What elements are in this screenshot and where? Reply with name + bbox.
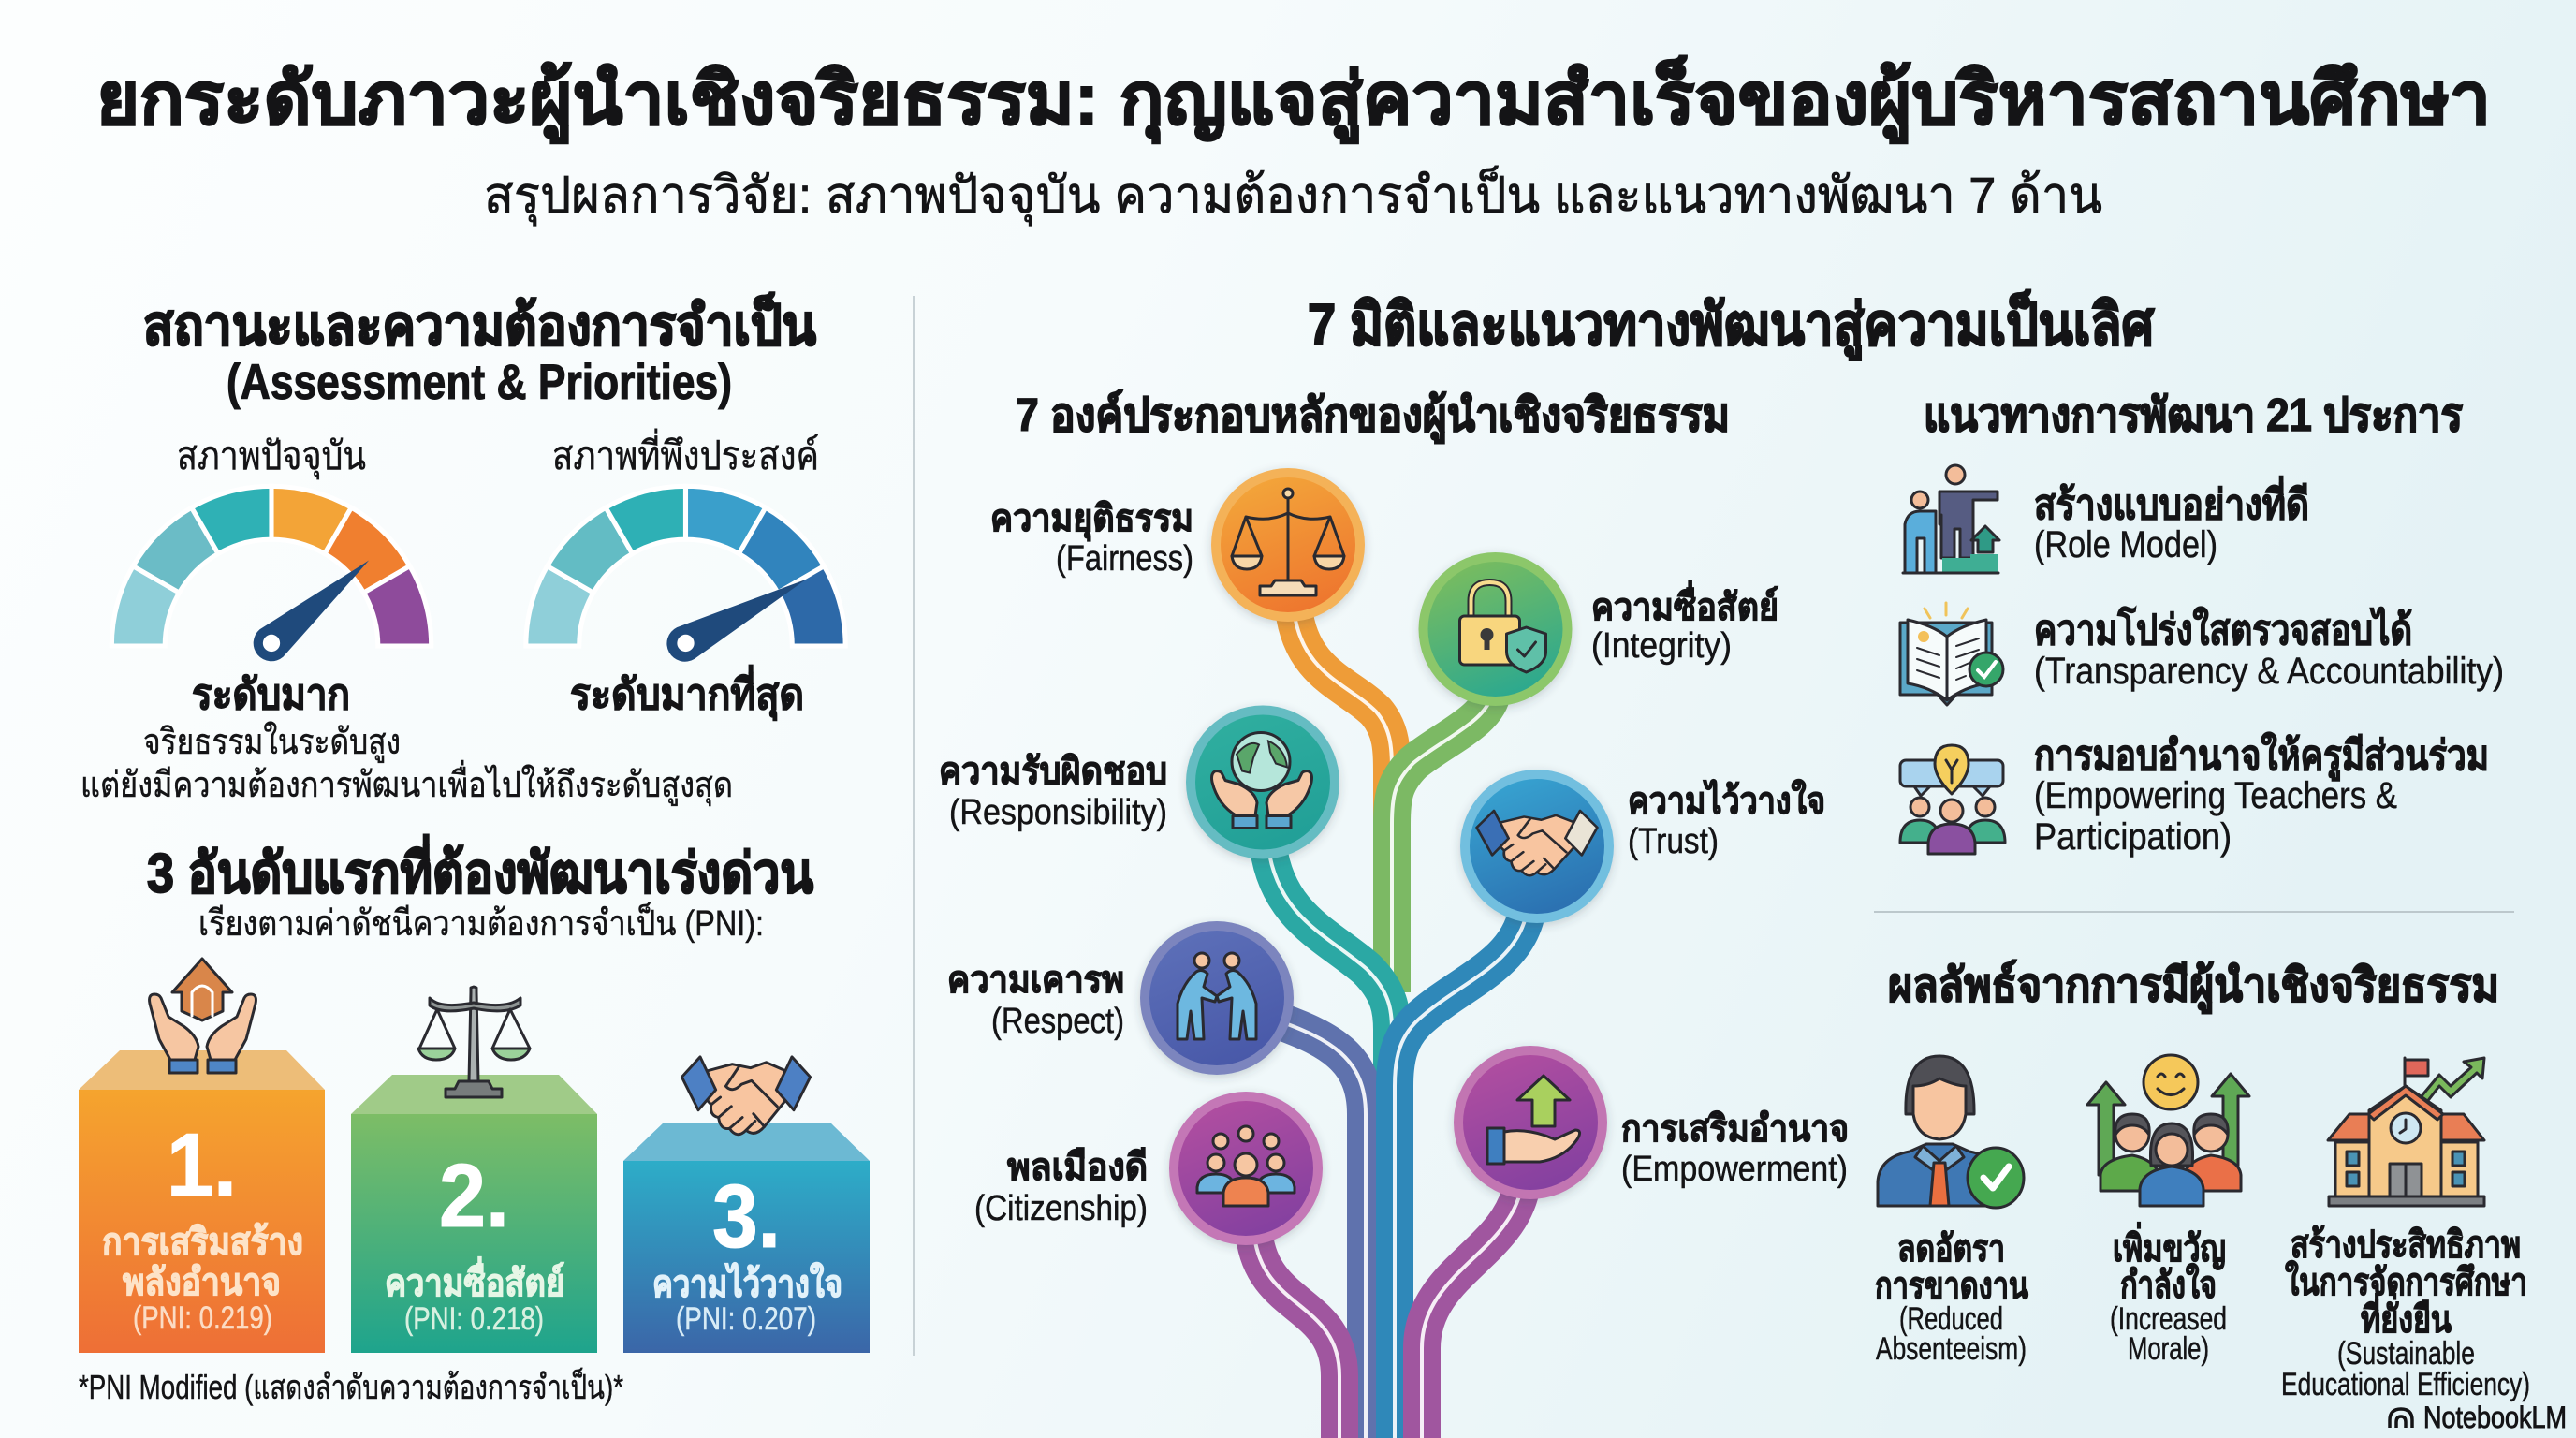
- node: fairness: ความยุติธรรม: [990, 498, 1193, 542]
- heading: assessment: (Assessment & Priorities): [227, 355, 732, 410]
- node: trust: (Trust): [1628, 822, 1719, 861]
- icon: hand raising arrow: [1487, 1076, 1580, 1164]
- podium 3: trust: (PNI: 0.207): [676, 1301, 816, 1337]
- icon: hands holding school: [150, 959, 256, 1073]
- title: ยกระดับภาวะผู้นำเชิงจริยธรรม: กุญแจสู่ความสำเร็จของผู้บริหารสถานศึกษา: [96, 55, 2491, 144]
- node: responsibility: (Responsibility): [949, 793, 1167, 832]
- heading: 21 guidelines: แนวทางการพัฒนา 21 ประการ: [1924, 390, 2463, 441]
- node: integrity: [1419, 552, 1778, 706]
- icon: handshake: [681, 1057, 811, 1135]
- heading: top three priorities: เรียงตามค่าดัชนีความต้องการจำเป็น (PNI):: [198, 902, 764, 944]
- node: citizenship: พลเมืองดี: [1007, 1147, 1148, 1188]
- outcome: increased morale: [2087, 1055, 2249, 1367]
- icon: hands holding globe: [1211, 732, 1312, 828]
- heading: top three priorities: 3 อันดับแรกที่ต้องพัฒนาเร่งด่วน: [147, 834, 813, 904]
- item: role model: [1903, 465, 2309, 573]
- item: empowering teachers: Participation): [2034, 816, 2232, 858]
- node: trust: ความไว้วางใจ: [1628, 779, 1825, 822]
- footnote: *PNI Modified (แสดงลำดับความต้องการจำเป็น)*: [79, 1366, 623, 1406]
- outcome: increased morale: (Increased: [2110, 1301, 2227, 1337]
- icon: two people bowing: [1178, 953, 1256, 1039]
- podium 2: integrity: ความซื่อสัตย์: [385, 1256, 564, 1304]
- item: empowering teachers: การมอบอำนาจให้ครูมีส่วนร่วม: [2034, 731, 2489, 781]
- gauge explanation: จริยธรรมในระดับสูง: [143, 722, 401, 763]
- icon: smiling group with arrows: [2087, 1055, 2249, 1206]
- node: fairness: [990, 468, 1365, 622]
- heading: seven dimensions: 7 มิติและแนวทางพัฒนาสู่ความเป็นเลิศ: [1308, 289, 2155, 360]
- icon: lock and shield: [1460, 582, 1546, 672]
- node: empowerment: การเสริมอำนาจ: [1621, 1108, 1849, 1150]
- item: empowering teachers: [1900, 731, 2489, 858]
- podium 2: integrity: (PNI: 0.218): [404, 1301, 544, 1337]
- gauge: current state: สภาพปัจจุบัน: [177, 433, 366, 480]
- node: responsibility: [939, 706, 1339, 859]
- heading: assessment: [143, 292, 816, 410]
- outcome: reduced absenteeism: Absenteeism): [1876, 1331, 2027, 1367]
- gauge explanation: แต่ยังมีความต้องการพัฒนาเพื่อไปให้ถึงระดับสูงสุด: [80, 760, 733, 806]
- outcome: sustainable efficiency: (Sustainable: [2337, 1336, 2475, 1372]
- node: citizenship: [974, 1092, 1323, 1245]
- panel: outcomes: [1875, 960, 2530, 1402]
- outcome: sustainable efficiency: สร้างประสิทธิภาพ: [2291, 1225, 2521, 1266]
- podium 1: empowerment: พลังอำนาจ: [123, 1262, 281, 1303]
- icon: school with growth arrow: [2328, 1058, 2484, 1206]
- gauge: desired state: สภาพที่พึงประสงค์: [552, 429, 819, 477]
- podium 1: empowerment: (PNI: 0.219): [133, 1300, 272, 1336]
- podium 1: empowerment: การเสริมสร้าง: [102, 1222, 303, 1263]
- icon: open book with check: [1900, 603, 2003, 705]
- heading: top three priorities: [147, 834, 813, 944]
- node: citizenship: (Citizenship): [974, 1189, 1148, 1228]
- item: empowering teachers: (Empowering Teachers &: [2034, 775, 2397, 816]
- node: fairness: (Fairness): [1056, 539, 1193, 579]
- item: transparency: [1900, 603, 2504, 705]
- outcome: reduced absenteeism: (Reduced: [1899, 1301, 2003, 1337]
- outcome: reduced absenteeism: [1875, 1056, 2028, 1367]
- heading: seven components: 7 องค์ประกอบหลักของผู้นำเชิงจริยธรรม: [1016, 389, 1730, 444]
- outcome: reduced absenteeism: ลดอัตรา: [1897, 1228, 2005, 1269]
- heading: assessment: สถานะและความต้องการจำเป็น: [143, 292, 816, 357]
- outcome: increased morale: เพิ่มขวัญ: [2113, 1222, 2226, 1270]
- gauge: current state: [111, 433, 432, 718]
- icon: handshake: [1477, 811, 1597, 875]
- panel: assessment and priorities: [79, 292, 870, 1406]
- gauge: desired state: [526, 429, 845, 721]
- node: respect: (Respect): [991, 1002, 1124, 1041]
- podium 3: trust: ความไว้วางใจ: [652, 1262, 842, 1305]
- podium 2: integrity: 2.: [439, 1146, 509, 1246]
- node: integrity: (Integrity): [1591, 626, 1732, 666]
- gauge explanation: [80, 722, 733, 806]
- outcome: sustainable efficiency: [2281, 1058, 2530, 1402]
- outcome: reduced absenteeism: การขาดงาน: [1875, 1266, 2028, 1307]
- icon: employee with check: [1878, 1056, 2024, 1208]
- item: transparency: (Transparency & Accountability): [2034, 651, 2504, 692]
- outcome: increased morale: กำลังใจ: [2120, 1263, 2217, 1306]
- heading: outcomes: ผลลัพธ์จากการมีผู้นำเชิงจริยธรรม: [1888, 960, 2499, 1014]
- icon: community group: [1197, 1126, 1295, 1206]
- icon: scales of justice: [418, 987, 530, 1097]
- icon: role model figures: [1903, 465, 1999, 573]
- outcome: increased morale: Morale): [2128, 1331, 2209, 1367]
- item: role model: สร้างแบบอย่างที่ดี: [2034, 476, 2309, 528]
- outcome: sustainable efficiency: ที่ยั่งยืน: [2361, 1293, 2452, 1341]
- tree branches: [1254, 609, 1527, 1438]
- node: respect: ความเคารพ: [947, 960, 1124, 1001]
- node: responsibility: ความรับผิดชอบ: [939, 751, 1167, 792]
- gauge: desired state: ระดับมากที่สุด: [570, 665, 804, 721]
- item: role model: (Role Model): [2034, 524, 2217, 565]
- podium 2: integrity: [351, 987, 597, 1353]
- podium 3: trust: [623, 1057, 870, 1353]
- panel: development guidelines: [1900, 390, 2504, 858]
- node: integrity: ความซื่อสัตย์: [1591, 580, 1778, 628]
- panel: seven dimensions: [939, 289, 2155, 1438]
- gauge: current state: ระดับมาก: [192, 670, 350, 718]
- icon: group with idea bubble: [1900, 745, 2005, 854]
- node: trust: [1460, 770, 1825, 923]
- podium 3: trust: 3.: [712, 1167, 781, 1267]
- node: empowerment: (Empowerment): [1621, 1150, 1848, 1189]
- icon: scales: [1232, 489, 1344, 595]
- subtitle: สรุปผลการวิจัย: สภาพปัจจุบัน ความต้องการจำเป็น และแนวทางพัฒนา 7 ด้าน: [484, 166, 2102, 227]
- node: respect: [947, 921, 1294, 1075]
- node: empowerment: [1454, 1046, 1849, 1199]
- podium 1: empowerment: [79, 959, 325, 1353]
- item: transparency: ความโปร่งใสตรวจสอบได้: [2034, 605, 2412, 653]
- podium 1: empowerment: 1.: [167, 1115, 237, 1215]
